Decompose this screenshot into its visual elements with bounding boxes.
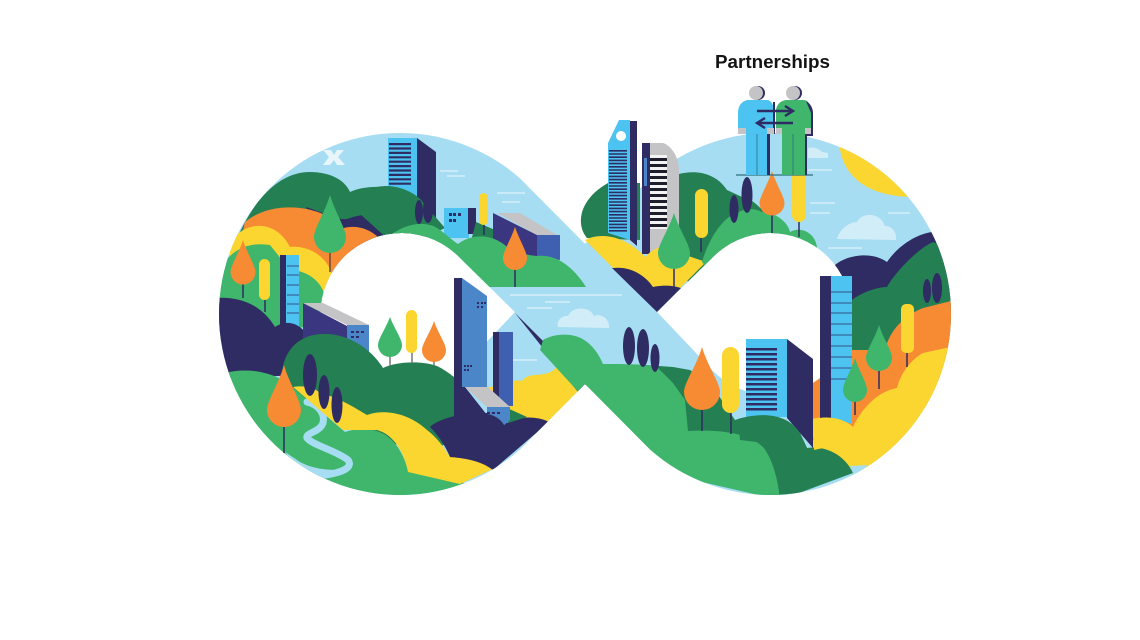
tree: large orange lower left <box>267 365 301 453</box>
tree: yellow lower centre <box>722 347 739 434</box>
person blue leg line <box>756 134 758 175</box>
medium green hill middle <box>540 335 780 500</box>
top right scene <box>581 120 817 312</box>
yellow mound at tower base <box>814 418 860 450</box>
person blue body <box>738 100 774 175</box>
person blue arm shadow <box>767 102 775 175</box>
infinity band scenery with holes <box>210 125 960 505</box>
tower with white circle <box>608 120 637 246</box>
tree: yellow by towers <box>695 189 708 252</box>
tree: right lobe leaves <box>923 273 942 303</box>
lower scenery clipped to outer shape <box>210 298 955 500</box>
navy face <box>493 213 537 258</box>
tree: green by towers <box>658 213 690 288</box>
top left tower <box>388 138 436 220</box>
right lobe navy hill <box>830 232 955 320</box>
right lobe dark green hill <box>850 242 955 360</box>
face <box>746 339 787 417</box>
floor lines <box>831 292 852 379</box>
white face and stripes <box>650 155 667 229</box>
angled building left <box>303 303 369 352</box>
medium-dark green hills bottom <box>645 365 853 500</box>
cloud small top right <box>808 147 828 158</box>
cloud right <box>837 215 896 240</box>
person green sleeves <box>776 128 811 134</box>
blue face <box>831 276 852 424</box>
navy hill front of centre tower <box>430 414 505 445</box>
tree: orange top <box>503 227 527 287</box>
person green shadow <box>788 86 802 100</box>
leaves under partners <box>730 177 752 223</box>
navy hill front <box>612 268 681 312</box>
tree: orange under partners <box>760 171 784 233</box>
blue face <box>462 278 487 387</box>
infographic canvas <box>219 54 951 495</box>
tower side <box>417 138 436 220</box>
right lobe yellow hill <box>810 346 955 470</box>
leaves top left <box>415 197 433 224</box>
left tower <box>280 255 299 327</box>
person green head <box>786 86 800 100</box>
tower face <box>388 138 418 198</box>
blue face <box>286 255 299 327</box>
tree: yellow top <box>479 193 488 235</box>
navy spine <box>454 278 462 417</box>
right lobe orange hill <box>812 300 955 440</box>
person green body <box>776 100 811 175</box>
cloud: X shape <box>323 150 345 165</box>
navy face <box>303 303 347 339</box>
green hill left <box>216 244 325 340</box>
tree: orange left <box>230 240 256 298</box>
person blue head <box>749 86 763 100</box>
navy hill left <box>215 298 305 378</box>
grey roof <box>497 213 557 235</box>
blue end <box>537 235 560 260</box>
lower band under-layer: yellow hills centre <box>488 368 582 423</box>
sky wedge bottom left <box>285 452 334 478</box>
blue face <box>608 120 630 240</box>
small blue building <box>444 208 476 238</box>
river <box>307 402 349 475</box>
blue end <box>347 325 369 352</box>
person blue shadow <box>751 86 765 100</box>
tree: green <box>378 317 402 366</box>
navy base <box>454 387 487 420</box>
navy spine <box>820 276 831 421</box>
leaves centre <box>623 327 660 372</box>
crossing shadow wedge <box>515 313 587 392</box>
navy side <box>630 121 637 246</box>
top green hill strip <box>385 224 586 287</box>
dark green hill right of towers <box>679 172 790 290</box>
floor lines <box>287 266 299 313</box>
tree: green left <box>314 195 346 272</box>
tree: yellow <box>406 310 417 363</box>
orange hill left <box>235 207 378 290</box>
leaves lower left <box>303 354 342 423</box>
arrow left <box>757 118 793 128</box>
heading: Partnerships: Partnerships <box>715 51 830 72</box>
tree: green right lower <box>843 358 867 415</box>
second centre tower <box>493 332 513 408</box>
curved grey tower <box>642 143 679 254</box>
side <box>787 339 813 448</box>
grey roof building centre <box>465 387 510 427</box>
building windows <box>449 213 461 222</box>
dark green central hill <box>282 334 457 450</box>
navy hill behind orange <box>306 207 393 252</box>
left lobe dark green hills <box>240 172 445 245</box>
yellow hills bottom <box>293 386 495 484</box>
sky wedge bottom right <box>850 465 868 474</box>
medium green mound <box>702 209 817 266</box>
black stripes <box>650 158 667 227</box>
trees centre trio <box>378 310 446 366</box>
platform line <box>736 174 813 176</box>
medium green bottom left <box>228 370 464 495</box>
tree: yellow left <box>259 259 270 312</box>
stripes <box>609 150 627 232</box>
arrow right <box>757 106 793 116</box>
dark green sliver behind top hills <box>472 222 493 238</box>
tall tower right <box>820 276 852 424</box>
tree: yellow under partners <box>792 175 806 237</box>
centre tall tower <box>454 278 487 420</box>
crossing sky strip <box>485 155 699 390</box>
navy side <box>280 255 287 327</box>
sun <box>840 147 908 197</box>
stripes <box>746 348 777 412</box>
grey body <box>650 143 679 254</box>
building body <box>444 208 469 238</box>
top left hills covering tower <box>362 186 444 237</box>
navy spine <box>642 143 650 254</box>
person green shadow edge <box>805 101 813 175</box>
white circle <box>616 131 626 141</box>
icon: partners shaking hands <box>736 86 813 175</box>
sky lines <box>440 170 910 360</box>
person green leg line <box>792 134 794 175</box>
tree: orange <box>422 321 446 365</box>
tree: yellow right <box>901 304 914 367</box>
cloud centre <box>558 308 609 328</box>
yellow hill front <box>585 236 706 288</box>
tower stripes <box>389 143 411 187</box>
windows <box>464 302 486 371</box>
navy hill bottom centre <box>430 413 549 470</box>
dome dark green <box>581 183 640 240</box>
sky base <box>210 125 960 505</box>
tree: orange lower centre <box>684 347 720 431</box>
dark green bit right of centre tower <box>508 409 527 423</box>
building side <box>468 208 476 234</box>
tall building bottom right <box>746 339 813 448</box>
dark green hill over building <box>738 415 807 448</box>
tree: green right upper <box>866 325 892 389</box>
person blue sleeves <box>738 128 774 134</box>
windows <box>351 331 364 338</box>
grey roof <box>303 303 369 325</box>
angled building top <box>493 213 560 260</box>
blue window <box>644 158 647 186</box>
yellow hill left <box>229 226 332 295</box>
